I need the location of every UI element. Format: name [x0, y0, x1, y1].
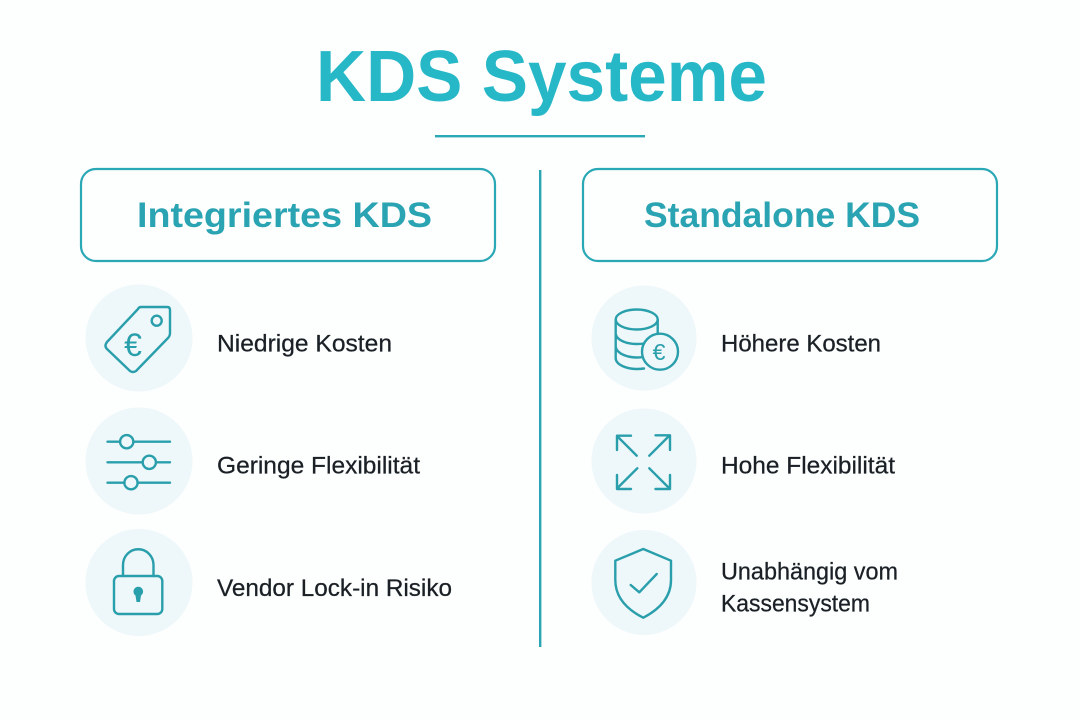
heading: Standalone KDS: Standalone KDS — [644, 196, 920, 235]
item: Geringe Flexibilität: Geringe Flexibilität — [217, 452, 420, 480]
item: Unabhängig vom Kassensystem: Kassensystem — [721, 590, 870, 618]
icon: expand arrows — [592, 408, 696, 514]
icon: price tag with euro — [86, 284, 192, 392]
icon: coin stack with euro: € — [653, 339, 666, 365]
item: Hohe Flexibilität: Hohe Flexibilität — [721, 452, 895, 480]
item: Höhere Kosten: Höhere Kosten — [721, 330, 881, 358]
item: Unabhängig vom Kassensystem — [721, 558, 898, 618]
item: Niedrige Kosten: Niedrige Kosten — [217, 330, 392, 358]
icon: price tag with euro: € — [124, 327, 142, 363]
title: KDS Systeme — [316, 37, 767, 117]
item: Unabhängig vom Kassensystem: Unabhängig vom — [721, 558, 898, 586]
icon: padlock — [86, 529, 192, 636]
icon: coin stack with euro — [592, 286, 696, 390]
heading: Standalone KDS — [583, 169, 997, 261]
icon: shield with check — [592, 530, 696, 635]
center divider — [539, 170, 541, 647]
item: Vendor Lock-in Risiko: Vendor Lock-in Risiko — [217, 575, 452, 602]
title underline — [435, 135, 645, 137]
icon: sliders — [86, 408, 192, 514]
heading: Integriertes KDS: Integriertes KDS — [137, 196, 432, 235]
panel: Standalone KDS — [583, 169, 997, 635]
panel: Integriertes KDS — [81, 169, 495, 636]
heading: Integriertes KDS — [81, 169, 495, 261]
